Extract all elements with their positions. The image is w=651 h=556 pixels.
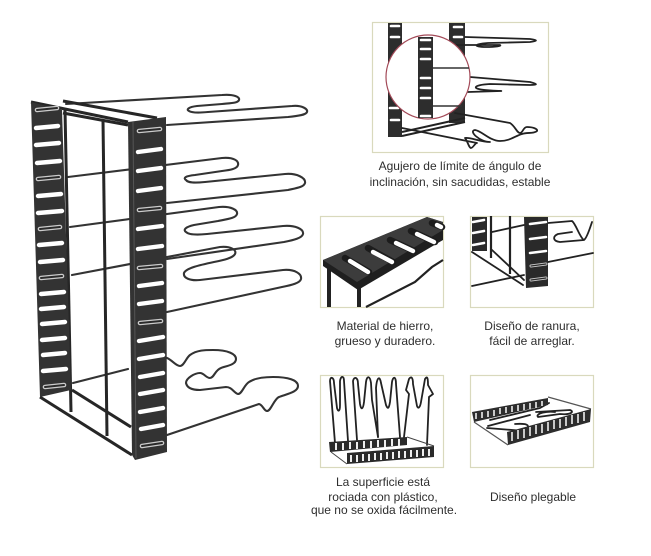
caption: plastic coating: rociada con plástico,: [328, 490, 438, 504]
caption: plastic coating: [311, 475, 457, 517]
caption: slot design: fácil de arreglar.: [489, 334, 575, 348]
magnifier circle: [386, 35, 470, 119]
panel: slot design detail: [470, 216, 594, 308]
detail wires: [402, 37, 537, 148]
rack frame bars: [31, 101, 157, 455]
closeup slotted plate: [323, 217, 443, 290]
closeup frame and wires: [472, 216, 593, 286]
folded base: [329, 437, 434, 464]
caption: angle limit hole: [370, 159, 551, 189]
folded slotted panels: [472, 398, 591, 445]
panel: foldable design detail: [470, 376, 594, 468]
caption: iron material: Material de hierro,: [337, 319, 433, 333]
panel: angle limit hole detail: [372, 22, 548, 152]
closeup legs and wire: [329, 260, 443, 307]
caption: foldable design: Diseño plegable: [490, 490, 576, 504]
right slotted panel: [128, 117, 167, 460]
caption: slot design: [484, 319, 580, 348]
closeup slotted columns: [472, 217, 548, 288]
caption: plastic coating: La superficie está: [336, 475, 430, 489]
caption: iron material: [335, 319, 435, 348]
rack rear wires: [66, 95, 307, 435]
folded frame lines and wires: [474, 397, 591, 445]
caption: plastic coating: que no se oxida fácilmente.: [311, 503, 457, 517]
main product: pan organizer rack: [31, 95, 307, 460]
left slotted panel: [31, 102, 71, 397]
caption: slot design: Diseño de ranura,: [484, 319, 580, 333]
panel: plastic coating detail: [320, 376, 444, 468]
caption: iron material: grueso y duradero.: [335, 334, 435, 348]
panel: iron material detail: [320, 216, 444, 308]
caption: angle limit hole: Agujero de límite de ángulo de: [379, 159, 542, 173]
caption: angle limit hole: inclinación, sin sacudidas, estable: [370, 175, 551, 189]
rack columns and bars: [388, 23, 465, 137]
upright wires: [330, 377, 433, 445]
